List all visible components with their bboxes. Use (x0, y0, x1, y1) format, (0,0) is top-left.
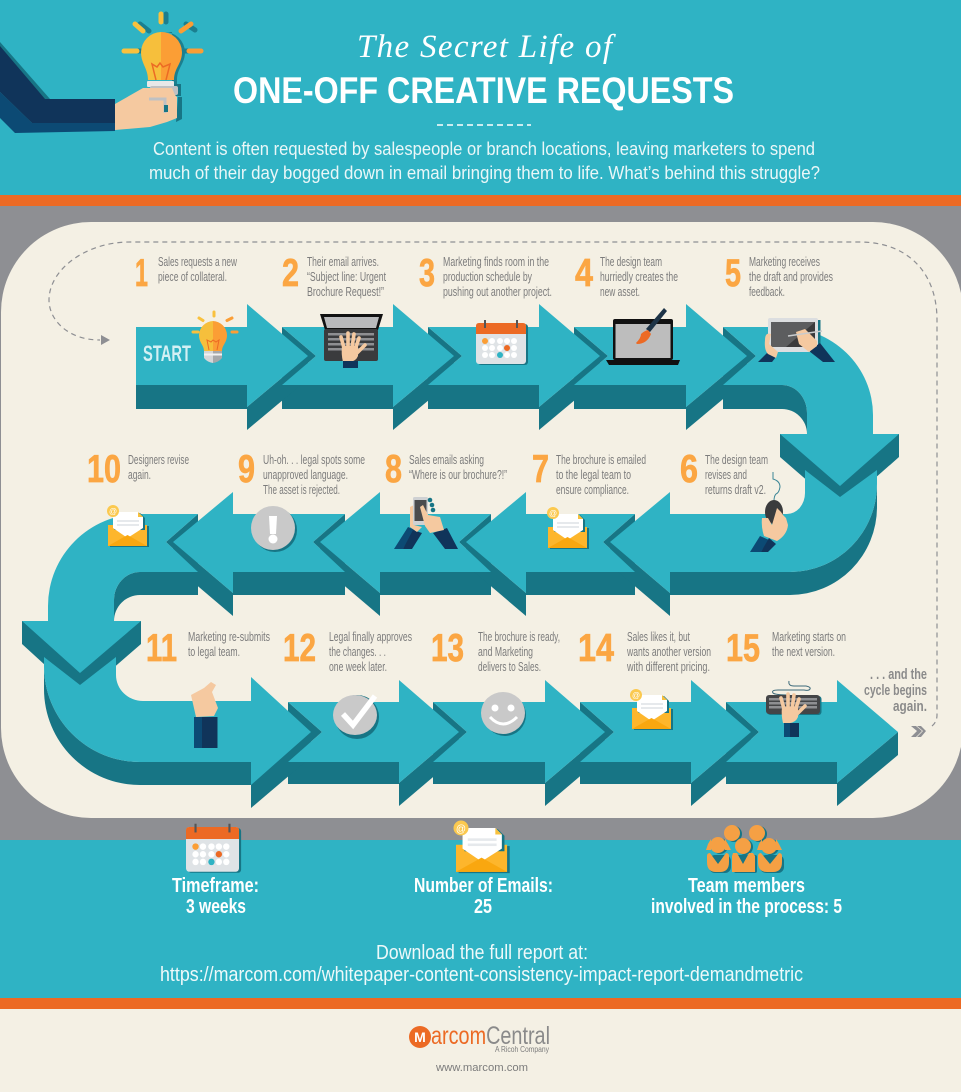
icon: calendar step 3 (476, 320, 528, 365)
step 10 (87, 448, 189, 491)
step 8 (385, 448, 507, 491)
logo: MarcomCentral (409, 1022, 550, 1054)
icon: smiley face (481, 692, 526, 736)
step 14: Sales likes it, but (627, 630, 690, 644)
step 12: the changes. . . (329, 645, 386, 659)
icon: envelope step 14: @ (632, 691, 640, 700)
stat: team members (651, 875, 842, 918)
stat: team members: Team members (688, 875, 805, 897)
row 2 dark extrusion (114, 484, 877, 621)
step 15 (726, 627, 846, 670)
dashed cycle return line (49, 242, 937, 737)
step 9: unapproved language. (263, 468, 348, 482)
row 2 arrows (22, 470, 877, 673)
step 3: pushing out another project. (443, 285, 552, 299)
down arrow 1 dark (780, 434, 899, 509)
step 4: new asset. (600, 285, 640, 299)
step 6: returns draft v2. (705, 483, 766, 497)
step 15: Marketing starts on (772, 630, 846, 644)
step 2: “Subject line: Urgent (307, 270, 386, 284)
icon: envelope step 7: @ (549, 509, 557, 518)
step 10: Designers revise (128, 453, 189, 467)
website: www.marcom.com (435, 1062, 528, 1074)
step 11 (146, 627, 270, 670)
step 3: production schedule by (443, 270, 533, 284)
step 11: to legal team. (188, 645, 240, 659)
step 8: 8 (385, 448, 402, 491)
icon: envelope step 10 (107, 505, 149, 547)
logo: MarcomCentral: arcomCentral (431, 1022, 550, 1050)
step 12: Legal finally approves (329, 630, 412, 644)
step 10: 10 (87, 448, 121, 491)
title main line: ONE-OFF CREATIVE REQUESTS (233, 70, 734, 111)
step 7 (532, 448, 646, 497)
icon: keyboard with hand (766, 681, 822, 737)
icon: team members (706, 825, 784, 873)
step 11: Marketing re-submits (188, 630, 270, 644)
step 6: revises and (705, 468, 747, 482)
stat: number of emails: 25 (474, 896, 492, 918)
step 15: 15 (726, 627, 760, 670)
step 10: again. (128, 468, 151, 482)
step 2 (282, 252, 386, 299)
step 2: Their email arrives. (307, 255, 379, 269)
step 1 (135, 252, 238, 295)
step 13: The brochure is ready, (478, 630, 560, 644)
icon: envelope emails (454, 820, 510, 873)
step 1: Sales requests a new (158, 255, 238, 269)
row 1 arrows (136, 304, 899, 486)
icon: hands with phone (394, 497, 458, 549)
intro text: Content is often requested by salespeople or branch locations, leaving marketers to spend (153, 139, 815, 159)
step 14: 14 (578, 627, 614, 670)
step 13 (431, 627, 560, 674)
cycle note: cycle begins (864, 682, 927, 699)
download call to action: https://marcom.com/whitepaper-content-consistency-impact-report-demandmetric (160, 964, 803, 986)
icon: mouse with hand (750, 472, 788, 552)
flow arrow: full process path (22, 304, 899, 808)
step 14 (578, 627, 711, 674)
step 7: to the legal team to (556, 468, 631, 482)
stat: team members: involved in the process: 5 (651, 896, 842, 918)
icon: calendar timeframe (186, 824, 241, 873)
step 9 (238, 448, 365, 497)
footer stats band (0, 840, 961, 998)
icon: envelope step 7 (547, 507, 589, 549)
icon: exclamation mark (251, 506, 297, 552)
step 12: 12 (283, 627, 316, 670)
step 6 (680, 448, 768, 497)
icon: small light bulb (193, 312, 237, 363)
step 5: feedback. (749, 285, 785, 299)
step 8: “Where is our brochure?!” (409, 468, 507, 482)
icon: crossed fingers hand (191, 682, 218, 748)
icon: envelope step 14 (630, 689, 673, 730)
cycle note: again. (893, 698, 927, 715)
cycle note: . . . and the (870, 666, 927, 683)
step 12: one week later. (329, 660, 387, 674)
title (233, 29, 734, 111)
title script line: The Secret Life of (357, 29, 616, 65)
icon: laptop with paint brush (606, 308, 680, 365)
icon: tablet with stylus hands (758, 318, 835, 362)
step 6: 6 (680, 448, 698, 491)
stat: timeframe: 3 weeks (186, 896, 246, 918)
step 5: the draft and provides (749, 270, 833, 284)
footer (0, 998, 961, 1092)
row 3 dark extrusion (44, 666, 898, 808)
icon: envelope step 10: @ (109, 507, 117, 516)
step 7: ensure compliance. (556, 483, 629, 497)
step 9: The asset is rejected. (263, 483, 340, 497)
cycle note (864, 666, 927, 715)
step 12 (283, 627, 412, 674)
step 4: The design team (600, 255, 662, 269)
row 1 dark extrusion (136, 356, 807, 434)
step 11: 11 (146, 627, 177, 670)
step 8: Sales emails asking (409, 453, 484, 467)
logo: MarcomCentral: A Ricoh Company (495, 1045, 549, 1054)
step 4: 4 (575, 252, 593, 295)
download call to action: Download the full report at: (376, 942, 588, 964)
step 3: 3 (419, 252, 435, 295)
step 5 (725, 252, 833, 299)
panel: process background (1, 222, 961, 818)
step 14: with different pricing. (626, 660, 710, 674)
step 1: piece of collateral. (158, 270, 227, 284)
step 4 (575, 252, 678, 299)
step 2: Brochure Request!” (307, 285, 384, 299)
step 5: 5 (725, 252, 741, 295)
icon: hand holding light bulb (0, 14, 201, 133)
start label: START (143, 341, 191, 366)
stat: timeframe: Timeframe: (172, 875, 259, 897)
step 14: wants another version (626, 645, 711, 659)
stat: timeframe (172, 875, 259, 918)
step 7: 7 (532, 448, 549, 491)
step 3: Marketing finds room in the (443, 255, 549, 269)
down arrow 2 dark (22, 621, 141, 697)
step 15: the next version. (772, 645, 835, 659)
step 9: 9 (238, 448, 255, 491)
icon: envelope emails: @ (456, 824, 466, 835)
step 7: The brochure is emailed (556, 453, 646, 467)
step 1: 1 (135, 252, 148, 295)
step 13: 13 (431, 627, 464, 670)
icon: check mark (333, 695, 379, 739)
step 4: hurriedly creates the (600, 270, 678, 284)
intro text (149, 139, 820, 183)
row 3 arrows (44, 657, 898, 785)
stat: number of emails (414, 875, 553, 918)
header band (0, 0, 961, 206)
stat: number of emails: Number of Emails: (414, 875, 553, 897)
step 2: 2 (282, 252, 299, 295)
logo: MarcomCentral: M (414, 1029, 426, 1045)
step 3 (419, 252, 552, 299)
intro text: much of their day bogged down in email bringing them to life. What’s behind this struggle? (149, 163, 820, 183)
step 6: The design team (705, 453, 768, 467)
step 13: and Marketing (478, 645, 533, 659)
icon: laptop with typing hand (320, 314, 383, 368)
step 13: delivers to Sales. (478, 660, 541, 674)
step 5: Marketing receives (749, 255, 820, 269)
download call to action (160, 942, 803, 986)
step 9: Uh-oh. . . legal spots some (263, 453, 365, 467)
